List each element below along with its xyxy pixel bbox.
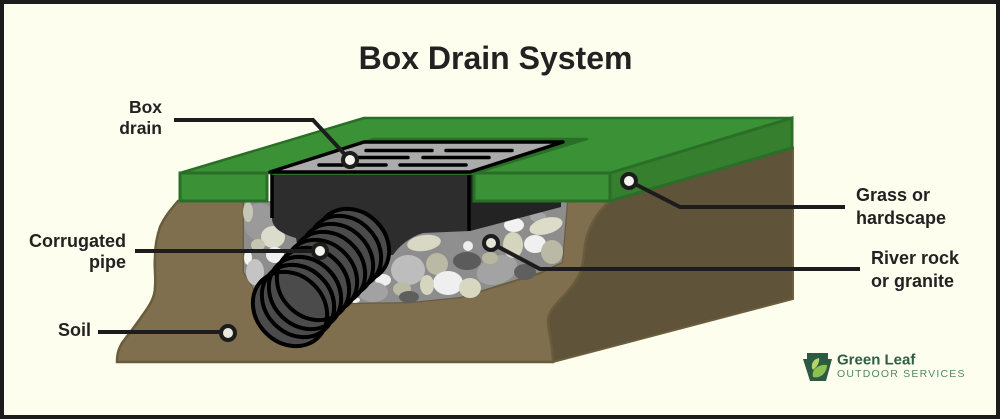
logo: Green Leaf Outdoor Services: OUTDOOR SERVICES	[837, 368, 966, 380]
label: box drain	[119, 97, 357, 167]
soil side face	[548, 148, 793, 362]
label: corrugated pipe	[29, 231, 327, 272]
title: Box Drain System	[359, 40, 632, 76]
label: grass or hardscape: hardscape	[856, 208, 946, 228]
label: soil: Soil	[58, 320, 91, 340]
label: box drain: Box	[129, 97, 162, 117]
label: river rock or granite	[484, 236, 960, 291]
grass right front slab	[474, 173, 610, 201]
icon: keystone with leaf	[803, 353, 832, 381]
label: soil	[58, 320, 235, 340]
label: grass or hardscape: Grass or	[856, 185, 930, 205]
grass left front slab	[180, 173, 267, 201]
label: corrugated pipe: pipe	[89, 252, 126, 272]
label: corrugated pipe: Corrugated	[29, 231, 126, 251]
logo: Green Leaf Outdoor Services: Green Leaf	[837, 352, 916, 368]
corrugated pipe	[238, 194, 404, 361]
grass right side face	[610, 118, 792, 201]
label: box drain: drain	[119, 118, 162, 138]
label: grass or hardscape	[622, 174, 946, 228]
grass top surface	[180, 118, 792, 173]
box drain body	[270, 173, 561, 262]
logo: Green Leaf Outdoor Services	[803, 352, 966, 381]
label: river rock or granite: or granite	[871, 271, 954, 291]
drain grate	[270, 142, 563, 172]
grate opening shadow	[270, 139, 587, 175]
label: river rock or granite: River rock	[871, 248, 960, 268]
soil front face	[117, 201, 610, 362]
river rock fill	[243, 201, 567, 303]
